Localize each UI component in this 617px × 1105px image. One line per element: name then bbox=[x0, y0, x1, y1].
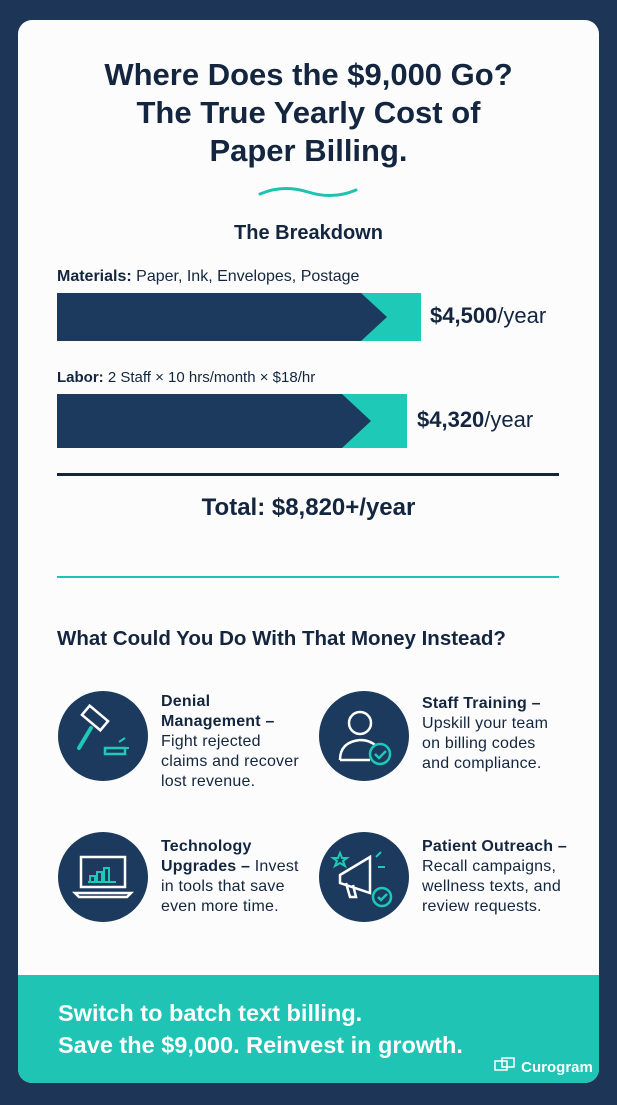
footer text: Switch to batch text billing. bbox=[58, 1000, 362, 1026]
item: denial management bbox=[58, 691, 299, 790]
title: Where Does the $9,000 Go? bbox=[104, 57, 513, 92]
text: Technology bbox=[161, 838, 252, 855]
text bbox=[161, 693, 299, 790]
text: Upskill your team on billing codes and compliance. bbox=[422, 715, 548, 772]
text: Patient Outreach – bbox=[422, 838, 567, 855]
footer text bbox=[58, 1000, 463, 1058]
value: materials: $4,500/year bbox=[430, 303, 546, 328]
value: labor: $4,320/year bbox=[417, 407, 533, 432]
footer text: Save the $9,000. Reinvest in growth. bbox=[58, 1032, 463, 1058]
text: Denial bbox=[161, 693, 210, 710]
text: Fight rejected claims and recover lost revenue. bbox=[161, 733, 299, 790]
icon: gavel bbox=[58, 691, 148, 781]
text: Recall campaigns, wellness texts, and review requests. bbox=[422, 858, 561, 915]
title: Paper Billing. bbox=[209, 133, 408, 168]
subheading: The Breakdown: The Breakdown bbox=[234, 222, 383, 244]
title bbox=[104, 57, 513, 168]
item: staff training bbox=[319, 691, 548, 781]
bar: labor bbox=[57, 394, 407, 448]
item: patient outreach bbox=[319, 832, 567, 922]
icon: megaphone bbox=[319, 832, 409, 922]
icon: laptop bbox=[58, 832, 148, 922]
materials label: Materials: Paper, Ink, Envelopes, Postage bbox=[57, 268, 359, 285]
logo: Curogram: Curogram bbox=[521, 1059, 593, 1076]
bar: materials bbox=[57, 293, 421, 341]
section heading: What Could You Do With That Money Instead? bbox=[57, 627, 506, 650]
footer band bbox=[18, 975, 599, 1083]
labor label: Labor: 2 Staff × 10 hrs/month × $18/hr bbox=[57, 369, 315, 386]
wave decoration bbox=[258, 187, 358, 197]
logo: Curogram bbox=[494, 1057, 593, 1076]
title: The True Yearly Cost of bbox=[136, 95, 480, 130]
text: Staff Training – bbox=[422, 695, 541, 712]
text: Management – bbox=[161, 713, 275, 730]
icon: person with check bbox=[319, 691, 409, 781]
total: Total: $8,820+/year bbox=[202, 494, 415, 521]
item: technology upgrades bbox=[58, 832, 299, 922]
text: Upgrades – Invest in tools that save even more time. bbox=[161, 858, 299, 915]
